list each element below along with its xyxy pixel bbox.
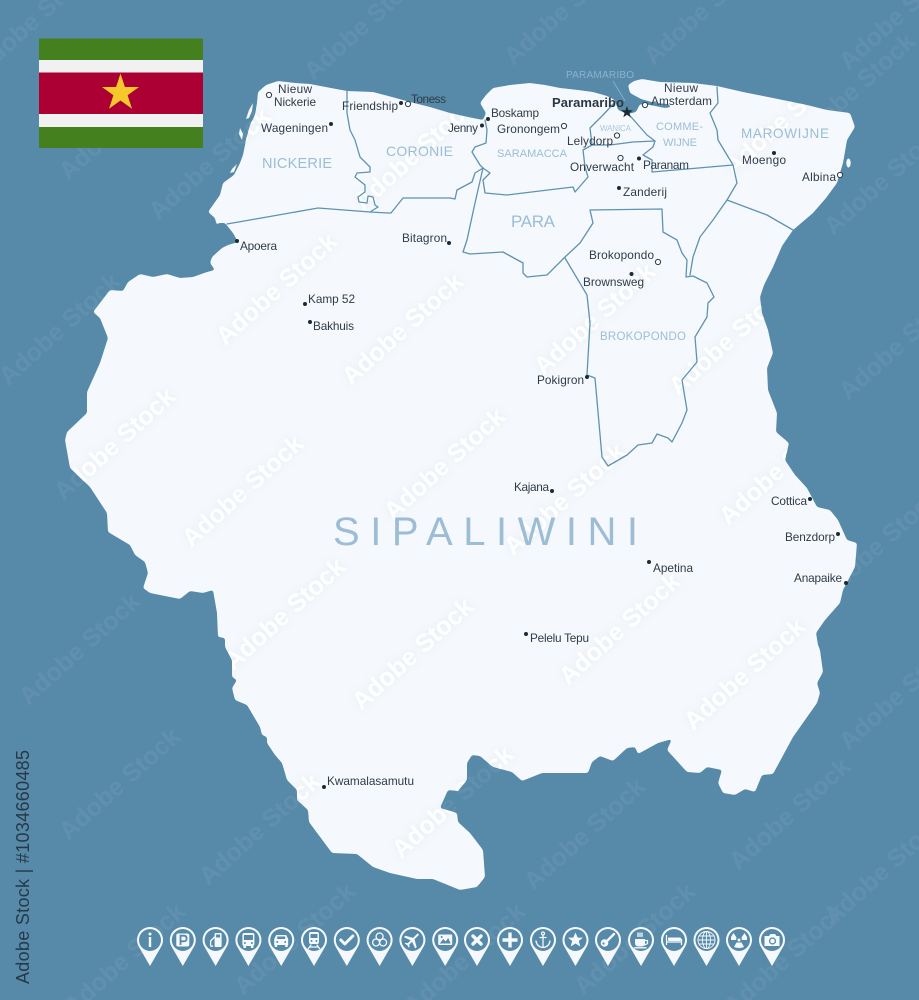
icon: biohazard bbox=[367, 927, 393, 966]
watermarks over the land: Adobe Stock bbox=[177, 429, 309, 553]
watermarks over the land: Adobe Stock bbox=[387, 740, 519, 864]
city labels and markers: Benzdorp bbox=[785, 530, 835, 544]
watermarks over the land: Adobe Stock bbox=[347, 592, 479, 716]
watermarks over the sea: Adobe Stock bbox=[229, 877, 361, 1000]
region labels: WANICA bbox=[600, 124, 632, 133]
land outline bbox=[65, 79, 857, 890]
watermarks over the land: Adobe Stock bbox=[337, 267, 469, 391]
city labels and markers: Brownsweg bbox=[583, 275, 644, 289]
city labels and markers: Pelelu Tepu bbox=[530, 631, 589, 645]
watermarks over the land: Adobe Stock bbox=[349, 92, 481, 216]
icon: check mark bbox=[334, 927, 360, 966]
icon: bus bbox=[235, 927, 261, 966]
city labels and markers: Cottica bbox=[771, 494, 807, 508]
region labels: SARAMACCA bbox=[497, 148, 568, 160]
watermarks over the land: Adobe Stock bbox=[714, 407, 846, 531]
city labels and markers: Boskamp bbox=[491, 106, 539, 120]
city labels and markers: Apetina bbox=[653, 561, 693, 575]
city labels and markers: Anapaike bbox=[794, 571, 842, 585]
city labels and markers: Kamp 52 bbox=[308, 292, 355, 306]
watermarks over the sea: Adobe Stock bbox=[789, 27, 919, 151]
icon: picture bbox=[432, 927, 458, 966]
Paramaribo callout bbox=[552, 70, 634, 117]
city labels and markers: Kajana bbox=[514, 480, 549, 494]
watermarks over the land: Adobe Stock bbox=[194, 767, 326, 891]
city labels and markers: Nickerie bbox=[274, 95, 316, 109]
city labels and markers: Zanderij bbox=[623, 185, 667, 199]
icon: star bbox=[562, 927, 588, 966]
icon: cross mark bbox=[464, 927, 490, 966]
city labels and markers: Wageningen bbox=[261, 121, 328, 135]
Paramaribo callout: PARAMARIBO bbox=[566, 70, 634, 81]
city labels and markers: Brokopondo bbox=[589, 248, 654, 262]
icon: information bbox=[137, 927, 163, 966]
region labels: WIJNE bbox=[663, 137, 697, 149]
city labels and markers: Kwamalasamutu bbox=[327, 774, 414, 788]
region labels: CORONIE bbox=[386, 143, 453, 159]
city labels and markers: Apoera bbox=[240, 239, 277, 253]
city labels and markers: Nieuw bbox=[664, 81, 698, 95]
icon: anchor bbox=[530, 927, 556, 966]
watermarks over the land: Adobe Stock bbox=[49, 382, 181, 506]
watermarks over the land: Adobe Stock bbox=[679, 612, 811, 736]
watermarks over the land: Adobe Stock bbox=[719, 57, 851, 181]
icon: radiation bbox=[726, 927, 752, 966]
coastal islets bbox=[230, 103, 851, 173]
map of Suriname bbox=[49, 57, 857, 891]
region labels: MAROWIJNE bbox=[741, 126, 829, 141]
city labels and markers: Paranam bbox=[643, 158, 689, 172]
icon: plus bbox=[497, 927, 523, 966]
icon: key bbox=[595, 927, 621, 966]
icon: bed bbox=[661, 927, 687, 966]
city labels and markers: Friendship bbox=[342, 99, 398, 113]
city labels and markers: Onverwacht bbox=[570, 160, 635, 174]
watermarks over the land: Adobe Stock bbox=[529, 257, 661, 381]
city labels and markers: Amsterdam bbox=[651, 94, 712, 108]
city labels and markers bbox=[235, 81, 848, 789]
city labels and markers: Bitagron bbox=[402, 231, 447, 245]
flag of Suriname bbox=[39, 38, 203, 148]
watermarks over the land: Adobe Stock bbox=[499, 437, 631, 561]
icon: fuel pump bbox=[203, 927, 229, 966]
region labels: NICKERIE bbox=[262, 156, 332, 172]
watermarks over the sea: Adobe Stock bbox=[569, 877, 701, 1000]
Paramaribo callout: Paramaribo bbox=[552, 95, 624, 110]
city labels and markers: Albina bbox=[802, 170, 836, 184]
region labels: SIPALIWINI bbox=[333, 510, 638, 554]
region labels: PARA bbox=[511, 212, 556, 231]
watermarks over the sea: Adobe Stock bbox=[14, 587, 146, 711]
city labels and markers: Bakhuis bbox=[313, 319, 354, 333]
region labels: BROKOPONDO bbox=[600, 331, 686, 343]
icon pin row bbox=[137, 914, 785, 979]
watermarks over the land bbox=[72, 102, 810, 858]
icon: car bbox=[268, 927, 294, 966]
watermarks over the land: Adobe Stock bbox=[379, 402, 511, 526]
watermarks over the land: Adobe Stock bbox=[554, 567, 686, 691]
city labels and markers: Toness bbox=[411, 92, 446, 106]
icon: airplane bbox=[380, 914, 445, 979]
region labels bbox=[262, 121, 829, 554]
icon: coffee cup bbox=[628, 927, 654, 966]
watermarks over the land: Adobe Stock bbox=[144, 102, 276, 226]
watermarks over the sea: Adobe Stock bbox=[54, 722, 186, 846]
city labels and markers: Jenny bbox=[448, 121, 478, 135]
city labels and markers: Pokigron bbox=[537, 373, 584, 387]
icon: camera bbox=[759, 927, 785, 966]
flag star bbox=[102, 74, 139, 109]
watermarks over the sea: Adobe Stock bbox=[144, 102, 276, 226]
icon: globe bbox=[694, 927, 720, 966]
watermarks over the sea: Adobe Stock bbox=[387, 740, 519, 864]
watermarks over the sea: Adobe Stock bbox=[54, 62, 186, 186]
watermarks over the sea: Adobe Stock bbox=[724, 752, 856, 876]
icon: train bbox=[301, 927, 327, 966]
icon: parking bbox=[170, 927, 196, 966]
region labels: COMME- bbox=[656, 121, 703, 133]
watermarks over the sea: Adobe Stock bbox=[194, 767, 326, 891]
city labels and markers: Gronongem bbox=[497, 122, 560, 136]
watermarks over the sea: Adobe Stock bbox=[49, 382, 181, 506]
city labels and markers: Moengo bbox=[742, 153, 786, 167]
watermarks over the land: Adobe Stock bbox=[211, 227, 343, 351]
stock credit: Adobe Stock | #1034660485 bbox=[13, 750, 33, 984]
watermarks over the land: Adobe Stock bbox=[219, 552, 351, 676]
watermarks over the land: Adobe Stock bbox=[664, 277, 796, 401]
district borders bbox=[227, 87, 793, 466]
watermarks over the sea: Adobe Stock bbox=[519, 772, 651, 896]
city labels and markers: Nieuw bbox=[278, 82, 312, 96]
city labels and markers: Lelydorp bbox=[567, 134, 613, 148]
